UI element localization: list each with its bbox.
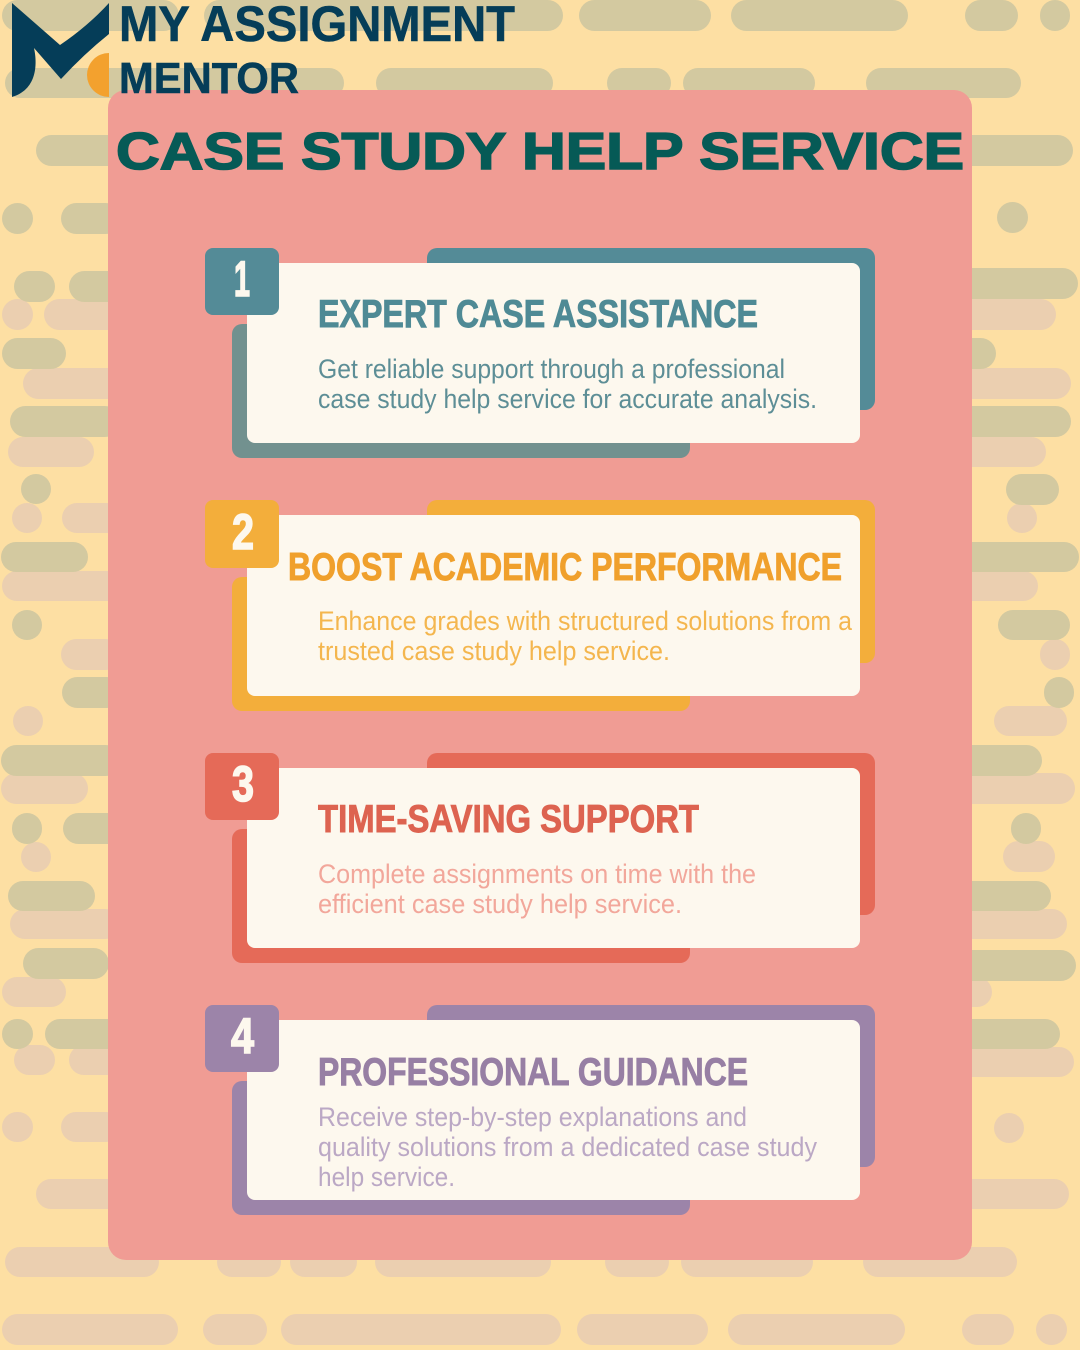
heading: EXPERT CASE ASSISTANCE <box>318 293 758 336</box>
number badge <box>205 248 279 315</box>
body text: trusted case study help service. <box>318 636 670 666</box>
logo icon: M mark <box>12 3 109 97</box>
card <box>247 768 860 948</box>
title: CASE STUDY HELP SERVICE <box>116 123 964 181</box>
number badge: 2 <box>232 504 254 560</box>
frame: bottom left <box>232 577 690 711</box>
body text <box>318 354 817 414</box>
number badge: 1 <box>234 251 250 307</box>
panel: step 2 boost academic performance <box>205 500 875 711</box>
body text: help service. <box>318 1162 455 1192</box>
frame: bottom left <box>232 829 690 963</box>
frame: top right <box>427 248 875 410</box>
body text <box>318 606 853 666</box>
panel: step 1 expert case assistance <box>205 248 875 458</box>
logo wordmark <box>119 0 515 103</box>
body text: Receive step-by-step explanations and <box>318 1102 747 1132</box>
main panel <box>108 90 972 1260</box>
card <box>247 1020 860 1200</box>
body text <box>318 1102 817 1192</box>
body text: Get reliable support through a professional <box>318 354 785 384</box>
panel: step 3 time-saving support <box>205 753 875 963</box>
frame: bottom left <box>232 324 690 458</box>
panel: step 4 professional guidance <box>205 1005 875 1215</box>
number badge <box>205 753 279 820</box>
body text: efficient case study help service. <box>318 889 682 919</box>
frame: top right <box>427 1005 875 1167</box>
logo wordmark: MENTOR <box>119 54 299 103</box>
number badge: 3 <box>232 756 254 812</box>
body text: Complete assignments on time with the <box>318 859 756 889</box>
card <box>247 515 860 696</box>
body text: case study help service for accurate analysis. <box>318 384 817 414</box>
heading: PROFESSIONAL GUIDANCE <box>318 1051 748 1094</box>
number badge <box>205 1005 279 1072</box>
frame: bottom left <box>232 1081 690 1215</box>
heading: TIME-SAVING SUPPORT <box>318 798 699 841</box>
frame: top right <box>427 500 875 663</box>
body text: quality solutions from a dedicated case study <box>318 1132 817 1162</box>
body text <box>318 859 756 919</box>
card <box>247 263 860 443</box>
number badge <box>205 500 279 568</box>
heading: BOOST ACADEMIC PERFORMANCE <box>288 546 842 589</box>
frame: top right <box>427 753 875 915</box>
body text: Enhance grades with structured solutions from a <box>318 606 853 636</box>
number badge: 4 <box>231 1008 254 1064</box>
